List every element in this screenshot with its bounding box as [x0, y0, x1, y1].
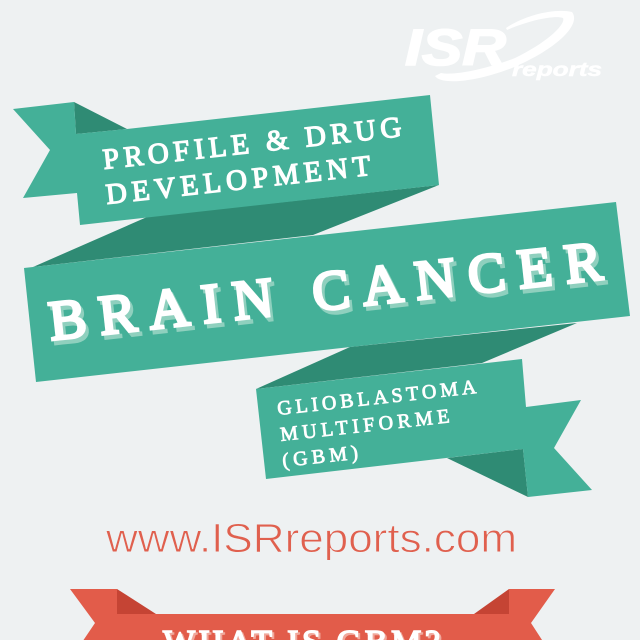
- subtitle: profile and drug development: PROFILE & DRUG: [101, 111, 403, 176]
- subtitle: glioblastoma multiforme: (GBM): [281, 442, 359, 472]
- logo: ISR reports: ISR: [405, 19, 506, 76]
- logo: ISR reports: [405, 11, 602, 81]
- subtitle: glioblastoma multiforme: GLIOBLASTOMA: [276, 376, 478, 420]
- title: brain cancer: BRAIN CANCER: [46, 230, 606, 353]
- ribbon: profile and drug development: [13, 95, 439, 267]
- ribbon: lower glioblastoma: [256, 323, 592, 497]
- subtitle: profile and drug development: DEVELOPMENT: [104, 150, 372, 211]
- subtitle: profile and drug development: [101, 111, 403, 211]
- title: brain cancer: BRAIN CANCER: [49, 234, 609, 357]
- website url: www.ISRreports.com: [105, 515, 517, 561]
- subtitle: glioblastoma multiforme: MULTIFORME: [279, 405, 451, 446]
- subtitle: glioblastoma multiforme: [276, 376, 478, 472]
- logo: ISR reports: reports: [512, 60, 602, 81]
- ribbon: main brain cancer band: [24, 202, 630, 382]
- ribbon: what is gbm: [70, 589, 555, 640]
